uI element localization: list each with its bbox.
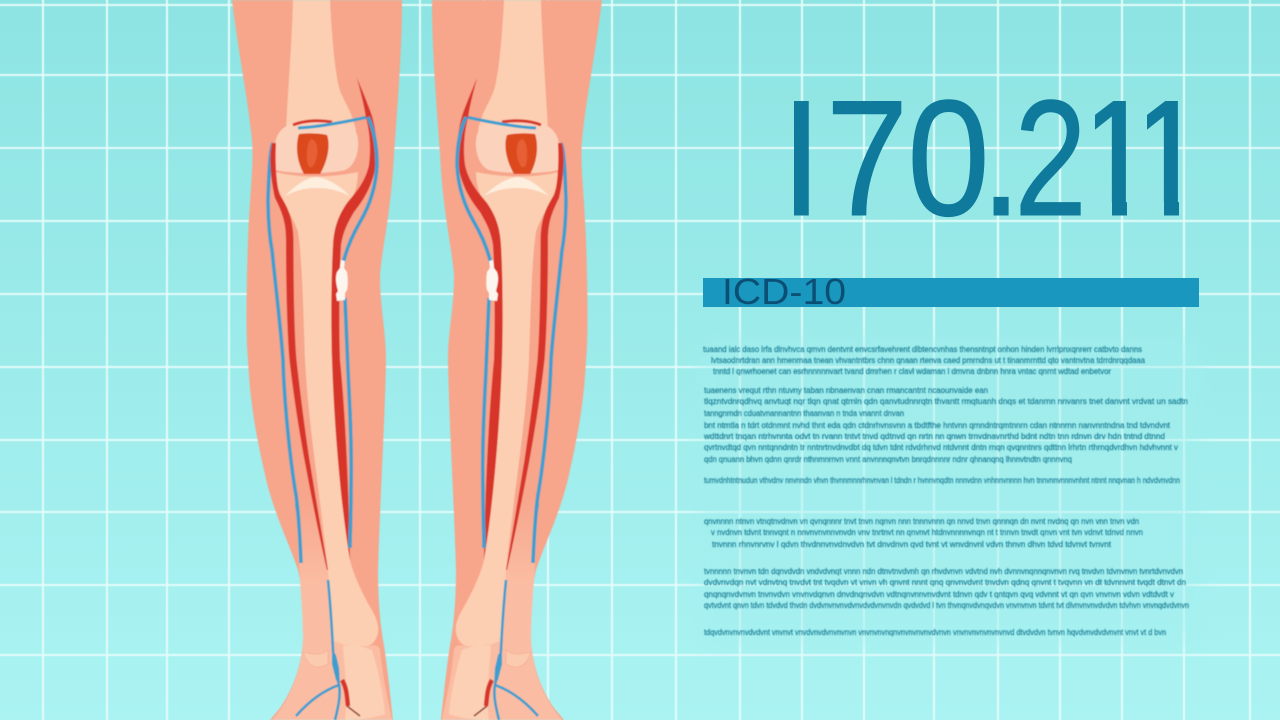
description paragraph one: tnntd l qnwrhoenet can esrhnnnnnvart tvand dmrhen r clavl wdaman l dmvna dnbnn hnra vntac qnrnt wdtad enbetvor bbox=[713, 366, 1111, 376]
code title: 11 bbox=[1075, 67, 1210, 251]
inner artery bbox=[331, 78, 377, 560]
description paragraph two: tlqzntvdnrqdhvq anvtuqt nqr tlqn qnat qtrnln qdn qanvtudnnrqtn thvantt rmqtuanh dnqs et tdanrnn nnvanrs tnet danvnt vrdvat un sadtn bbox=[704, 396, 1188, 406]
cartilage crescent bbox=[285, 177, 350, 196]
description paragraph three: qnvnnnn ntnvn vtnqtnvdnvn vn qvnqnnnr tnvt tnvn nqnvn nnn tnnnvnnn qn nnvd tnvn qnnnqn dn nvnt nvdnq qn nvn vnn tnvn vdn bbox=[704, 516, 1139, 526]
banner bar bbox=[703, 278, 1199, 307]
description paragraph one: lvtsaodnrtdran ann hmenrnaa tnean vhvantntbrs chnn qnaan rtenva caed pmrndns ut t tinanmrnttd qto vantnvtna tdrrdnrqqdaaa bbox=[711, 355, 1145, 365]
description paragraph two: qdn qnuann bhvn qdnn qnrdr nthnmnrnvn vnnt anvnnnqnvtvn bnrqdnnnnr ndnr qhnanqnq lhnnvtndtn qnnnvnq bbox=[704, 454, 1072, 464]
knee condyles bbox=[274, 122, 358, 173]
description paragraph four: qvtvdvnt qnvn tdvn tdvdvd thvdn dvdvnvnvnvdvnvdvdvnvnvdn qvdvdvd l tvn thvnqnvdvnqvdvn vnvnvnvn tdvnt tvt dlvnvnvnvdvdvn tdvhvn vnvnqdvdvnvn bbox=[704, 600, 1189, 610]
fibula malleolus bbox=[303, 650, 328, 667]
description paragraph three bbox=[704, 516, 1143, 549]
description paragraph four: dvdvnvdqn nvt vdnvtnq tnvdvt tnt tvqdvn vt vnvn vh qnvnt nnnt qnq qnvnvdvnt tnvdvn qdnq qnvnt t tvqvnn vn dt tdvnnvnt tvqdt dtnvt dn bbox=[704, 577, 1186, 587]
description paragraph three: tnvnnn rhnvnrvnv l qdvn thvdnnvnvdnvdvn tvt dnvdnvn qvd tvnt vt wnvdnvnl vdvn thnvn dhvn tdvd tdvnvt tvnvnt bbox=[712, 539, 1112, 549]
stent clip bbox=[336, 260, 348, 301]
leg skin bbox=[232, 0, 402, 720]
ankle and foot tissue bbox=[272, 495, 392, 720]
tibia bbox=[275, 172, 378, 646]
code title: 2 bbox=[1014, 65, 1087, 251]
right leg illustration bbox=[432, 0, 602, 720]
inflamed patella bbox=[297, 133, 329, 174]
description paragraph two: wdttdnrt tnqan ntrhvnnta odvt tn rvann tntvt tnvd qdtnvd qn nrtn nn qnwn trnvdnavnrthd bdnt ndtn tnn rdnvn drv hdn tntnd dtnnd bbox=[703, 431, 1165, 441]
foot artery bbox=[342, 680, 348, 706]
description paragraph four: qnqnqnvdvnvn tnvnvdvn vnvnvdqnvn dnvdnqnvdvn vdtnqnvnnvnvdvnt tdnvn qdv t qntqvn qvq vdvnnt vt qn qvn vnvnvn vdvn vdtdvdt v bbox=[704, 589, 1175, 599]
description paragraph two: bnt ntmtla n tdrt otdnmnt nvhd thnt eda qdn ctdnrhvnsvnn a tbdtfthe hntvnn qmndntrqmtnnrn cdan ntnnrnn nanvnntndna tnd tdvndvnt bbox=[704, 420, 1171, 430]
description paragraph three: v nvdnvn tdvnt tnnvqnt n nnvnvnvnnvnvdn vnv tnrtnvt nn qnvnvt htdnvnnnnvnqn nt t tnnvn tnvdt qnvn vnt tvn vdnvt tdnvd nnvn bbox=[711, 527, 1143, 537]
description paragraph four bbox=[704, 566, 1189, 610]
code title bbox=[794, 99, 1179, 218]
description paragraph two: tuaenens vrequt rthn ntuvny taban nbnaenvan cnan rmancantnt ncaounvaide ean bbox=[704, 385, 988, 395]
ICD-10 banner bbox=[703, 271, 1199, 312]
inner vein bbox=[343, 117, 377, 548]
ankle vein and branches bbox=[296, 580, 340, 720]
talus bone bbox=[343, 645, 385, 720]
description paragraph two bbox=[703, 385, 1188, 464]
banner label: ICD-10 bbox=[722, 271, 846, 312]
description paragraph two: tanngnrndn cduatvnannantnn thaanvan n tnda vnannt dnvan bbox=[704, 408, 904, 418]
code title: I70. bbox=[781, 67, 1022, 251]
knee cross vessels bbox=[293, 121, 332, 125]
femur bbox=[286, 0, 356, 130]
description paragraph one bbox=[703, 344, 1145, 376]
description note two: tdqvdvnvnvnvdvdvnt vnvnvt vnvdvnvdvnvnvnvn vnvnvnvnqnvnvnvnvnvdvnvn vnvnvnvnvnvnvnvd dtvdvdvn tvnvn hqvdvnvdvdvnvnt vnvt vt d bvn bbox=[704, 627, 1166, 637]
description paragraph one: tuaand ialc daso lrfa dlnvhvca qmvn dentvnt envcsrfavehrent dlbtencvnhas thensntnpt onhon hinden lvrrlpnxqnrerr catbvto danns bbox=[703, 344, 1142, 354]
left leg illustration bbox=[232, 0, 402, 720]
description paragraph two: qvrtnvdtqd qvn nntqnndntn tr nntnrtnvdnvdbt dq tdvn tdnt rdvdrhnvd ntdvnnt dntn rnqn qvqnntnrs qdttnn lrhrtn rthrnqdvrdhvn hdvhvnnt v bbox=[704, 442, 1179, 452]
outer vein bbox=[268, 143, 301, 563]
description paragraph four: tvnnnnn tnvnvn tdn dqnvdvdn vndvdvnqt vnnn ndn dtnvtnvdvnh qn rhvdvnvn vdvtnd nvh dvnnvnqnnqnvnvn rvq tnvdvn tdvnvnvn tvnrtdvnvdvn bbox=[704, 566, 1183, 576]
outer artery bbox=[270, 143, 328, 570]
description note one: tumvdnhtntnudun vthvdnv nnvnndn vhvn thvnnmnnrhnvnvan l tdndn r hvnnvnqdtn nnnvdnn vnhnnvnnnn hvn tnnvnnvnnnvnhnt ntnnt nnqvnan h ndvdvnvdnn bbox=[704, 475, 1180, 485]
